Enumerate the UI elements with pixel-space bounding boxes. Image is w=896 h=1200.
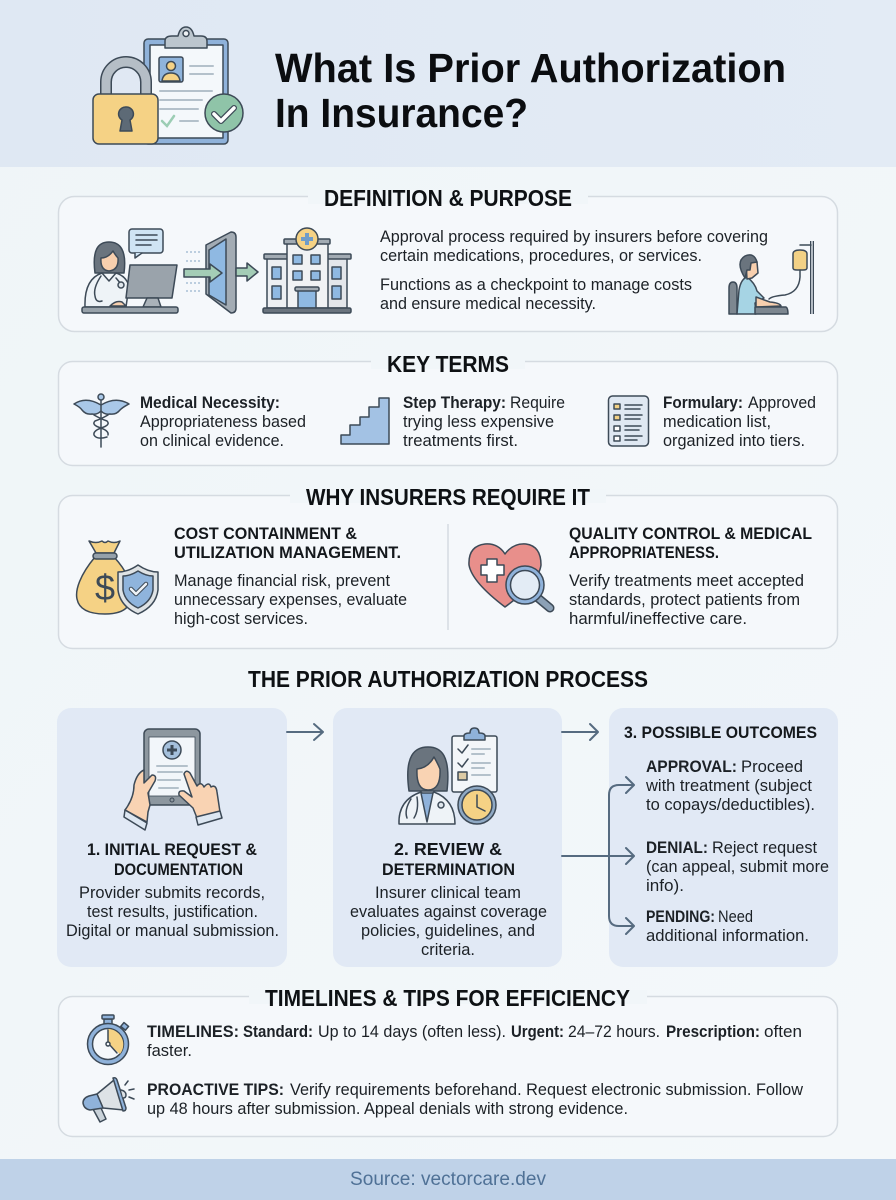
title: In Insurance? — [275, 90, 528, 136]
text: definition: certain medications, procedures, or services. — [380, 247, 702, 265]
text: step 2: 2. REVIEW & — [394, 839, 502, 859]
text: proactive tips: PROACTIVE TIPS: — [147, 1081, 284, 1099]
text: quality control: standards, protect patients from — [569, 591, 800, 609]
heading: timelines and tips: TIMELINES & TIPS FOR EFFICIENCY — [265, 985, 630, 1011]
text: cost containment: COST CONTAINMENT & — [174, 525, 357, 543]
text: timelines: often — [764, 1023, 802, 1041]
text: timelines: Prescription: — [666, 1023, 760, 1041]
text: pending — [646, 908, 809, 945]
text: timelines: faster. — [147, 1042, 192, 1060]
icon: hospital — [263, 228, 351, 313]
text: timelines: Urgent: — [511, 1023, 564, 1041]
text: timelines: TIMELINES: — [147, 1023, 239, 1041]
footer: source: Source: vectorcare.dev — [350, 1169, 546, 1190]
text: medical necessity: Medical Necessity: — [140, 394, 280, 412]
icon: formulary list — [608, 396, 648, 446]
text: pending: additional information. — [646, 927, 809, 945]
heading: definition and purpose: DEFINITION & PURPOSE — [324, 185, 572, 211]
arrow: step 1 to step 2 — [287, 724, 323, 740]
text: denial: info). — [646, 877, 684, 895]
text: proactive tips: up 48 hours after submission. Appeal denials with strong evidence. — [147, 1100, 628, 1118]
icon: portal screen — [206, 232, 236, 313]
text: step 1: Digital or manual submission. — [66, 922, 279, 940]
card: initial request — [57, 708, 287, 967]
icon: tablet with hands — [124, 729, 222, 830]
icon: stairs — [341, 398, 389, 444]
icon: stopwatch — [88, 1015, 129, 1064]
heading: key terms: KEY TERMS — [387, 351, 509, 377]
icon: caduceus — [74, 394, 129, 447]
title: What Is Prior Authorization — [275, 45, 786, 91]
arrow: branching outcomes — [562, 777, 634, 934]
icon: doctor at computer — [82, 229, 178, 313]
card: possible outcomes — [609, 708, 838, 967]
panel: definition and purpose — [58, 185, 838, 332]
text: step 3 heading: 3. POSSIBLE OUTCOMES — [624, 724, 817, 742]
text: step 2: evaluates against coverage — [350, 903, 547, 921]
text: definition: Functions as a checkpoint to manage costs — [380, 276, 692, 294]
footer: source — [0, 1159, 896, 1200]
text: step therapy: treatments first. — [403, 432, 518, 450]
text: formulary: organized into tiers. — [663, 432, 805, 450]
panel: why insurers require it — [58, 484, 838, 648]
text: cost containment: high-cost services. — [174, 610, 308, 628]
text: step 2: Insurer clinical team — [375, 884, 521, 902]
text: medical necessity — [140, 394, 306, 450]
text: timelines: Up to 14 days (often less). — [318, 1023, 506, 1041]
text: step therapy: Step Therapy: — [403, 394, 506, 412]
text: timelines: Standard: — [243, 1023, 313, 1041]
text: quality control: harmful/ineffective care. — [569, 610, 747, 628]
text: denial: Reject request — [712, 839, 817, 857]
text: cost containment: Manage financial risk, prevent — [174, 572, 390, 590]
text: approval: APPROVAL: — [646, 758, 737, 776]
text: formulary: Formulary: — [663, 394, 743, 412]
icon: patient with IV — [729, 241, 812, 314]
text: quality control: QUALITY CONTROL & MEDICAL — [569, 525, 812, 543]
text: approval: to copays/deductibles). — [646, 796, 815, 814]
text: step 2: policies, guidelines, and — [361, 922, 535, 940]
text: step 1 — [66, 841, 279, 940]
text: definition: and ensure medical necessity. — [380, 295, 596, 313]
text: pending: Need — [718, 908, 753, 926]
text: step 2: criteria. — [421, 941, 475, 959]
text: step therapy: trying less expensive — [403, 413, 554, 431]
icon: padlock and clipboard — [93, 27, 243, 144]
icon: money bag and shield — [77, 541, 158, 614]
text: quality control — [569, 525, 812, 628]
text: definition — [380, 228, 768, 313]
icon: heart and magnifier — [469, 544, 550, 608]
text: step 2: DETERMINATION — [382, 861, 515, 879]
text: approval: with treatment (subject — [645, 777, 812, 795]
text: proactive tips: Verify requirements beforehand. Request electronic submission. Follow — [290, 1081, 803, 1099]
title — [275, 45, 786, 136]
heading: why insurers require it: WHY INSURERS REQUIRE IT — [306, 484, 590, 510]
text: definition: Approval process required by insurers before covering — [380, 228, 768, 246]
text: quality control: APPROPRIATENESS. — [569, 544, 719, 562]
text: timelines: 24–72 hours. — [568, 1023, 660, 1041]
text: medical necessity: on clinical evidence. — [140, 432, 284, 450]
text: medical necessity: Appropriateness based — [140, 413, 306, 431]
text: step 1: DOCUMENTATION — [114, 861, 243, 879]
icon: megaphone — [83, 1078, 134, 1122]
text: denial — [646, 839, 829, 895]
text: timelines — [147, 1023, 802, 1060]
text: step therapy — [403, 394, 565, 450]
header band — [0, 0, 896, 167]
panel: timelines and tips — [58, 985, 838, 1136]
text: approval — [645, 758, 815, 814]
text: cost containment: UTILIZATION MANAGEMENT. — [174, 544, 401, 562]
text: cost containment: unnecessary expenses, evaluate — [174, 591, 407, 609]
heading: the prior authorization process: THE PRIOR AUTHORIZATION PROCESS — [248, 666, 648, 692]
panel: key terms — [58, 351, 838, 466]
arrow: into portal — [184, 252, 222, 291]
text: formulary: Approved — [748, 394, 816, 412]
arrow: step 2 to step 3 — [562, 724, 598, 740]
text: formulary — [663, 394, 816, 450]
icon: money bag and shield: $ — [95, 567, 115, 608]
text: denial: DENIAL: — [646, 839, 708, 857]
text: step 2 — [350, 839, 547, 959]
text: proactive tips — [147, 1081, 803, 1118]
text: step 1: Provider submits records, — [79, 884, 265, 902]
card: review — [333, 708, 562, 967]
arrow: to hospital — [236, 263, 258, 281]
text: cost containment — [174, 525, 407, 628]
text: step 1: test results, justification. — [87, 903, 258, 921]
text: approval: Proceed — [741, 758, 803, 776]
text: formulary: medication list, — [663, 413, 771, 431]
icon: reviewer with clipboard and clock — [399, 728, 497, 824]
text: step therapy: Require — [510, 394, 565, 412]
text: pending: PENDING: — [646, 908, 715, 926]
text: quality control: Verify treatments meet accepted — [569, 572, 804, 590]
text: denial: (can appeal, submit more — [646, 858, 829, 876]
text: step 1: 1. INITIAL REQUEST & — [87, 841, 257, 859]
